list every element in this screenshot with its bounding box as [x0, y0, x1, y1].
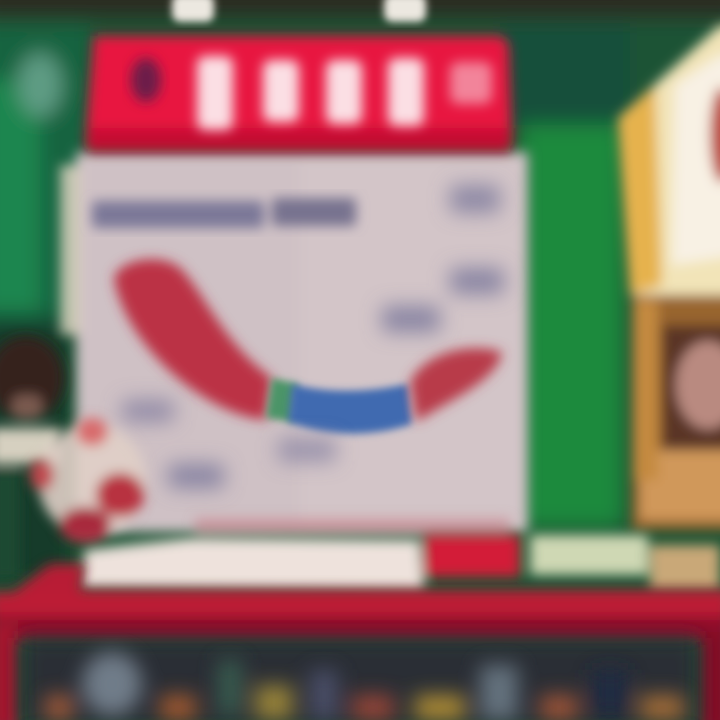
caption strips under the board	[80, 518, 720, 590]
red shelf	[0, 564, 720, 720]
white board panel	[60, 152, 528, 532]
right side: toy house	[618, 25, 720, 530]
chart segment: blue	[288, 384, 412, 434]
arc chart	[114, 259, 502, 434]
toy at left	[30, 418, 146, 543]
chart labels	[122, 185, 504, 488]
chart segment: green	[266, 378, 298, 422]
header logo mark	[131, 58, 161, 102]
chart segment: small red	[410, 348, 502, 422]
calendar pins	[172, 0, 426, 22]
chart heading	[92, 198, 356, 228]
header title blocks	[197, 56, 492, 130]
red calendar header	[86, 36, 512, 152]
shelf items	[22, 638, 698, 720]
figure at left	[0, 336, 64, 580]
chart segment: large red	[114, 259, 272, 420]
